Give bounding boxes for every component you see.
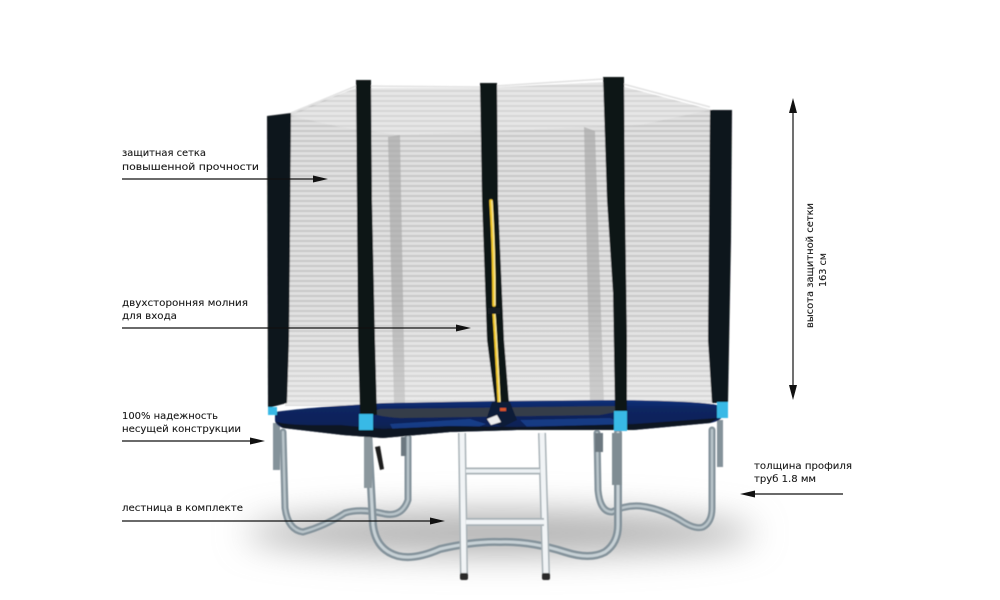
center zipper panel — [480, 83, 509, 402]
dimension label: net height — [805, 203, 829, 328]
callout: frame reliability: 100% надежность — [122, 411, 218, 422]
dimension label: net height: 163 см — [818, 253, 829, 287]
blue pole sleeves — [268, 402, 728, 431]
dimension label: net height: высота защитной сетки — [805, 203, 816, 328]
callout: ladder included: лестница в комплекте — [122, 503, 243, 514]
callout: protective net: повышенной прочности — [122, 162, 259, 173]
callout: tube thickness: труб 1.8 мм — [754, 474, 816, 485]
right pole padding — [708, 110, 732, 403]
jumping mat and blue frame padding — [275, 400, 722, 438]
callout: protective net: защитная сетка — [122, 148, 206, 159]
pole 2 padding — [356, 80, 377, 415]
zipper — [488, 201, 500, 402]
callout: tube thickness — [740, 461, 852, 498]
right leg loop — [595, 420, 723, 528]
callout: ladder included — [122, 503, 445, 524]
zipper tag — [486, 402, 517, 427]
callout: two-way zipper: для входа — [122, 311, 177, 322]
callout: protective net — [122, 148, 328, 182]
callout: frame reliability — [122, 411, 265, 444]
floor shadow — [245, 512, 755, 554]
front legs with curved base — [364, 430, 622, 557]
callout: two-way zipper: двухсторонняя молния — [122, 298, 248, 309]
left leg loop — [273, 423, 408, 532]
callout: tube thickness: толщина профиля — [754, 461, 852, 472]
enclosure poles — [267, 77, 732, 415]
safety net — [285, 82, 712, 406]
trampoline illustration — [267, 77, 732, 580]
net top edge — [291, 79, 710, 113]
left pole padding — [267, 113, 291, 408]
pole 4 padding — [603, 77, 627, 411]
callout: two-way zipper — [122, 298, 471, 332]
black strap — [375, 446, 384, 470]
ladder — [460, 433, 550, 580]
dimension arrow: net height — [789, 98, 797, 400]
callout: frame reliability: несущей конструкции — [122, 424, 241, 435]
